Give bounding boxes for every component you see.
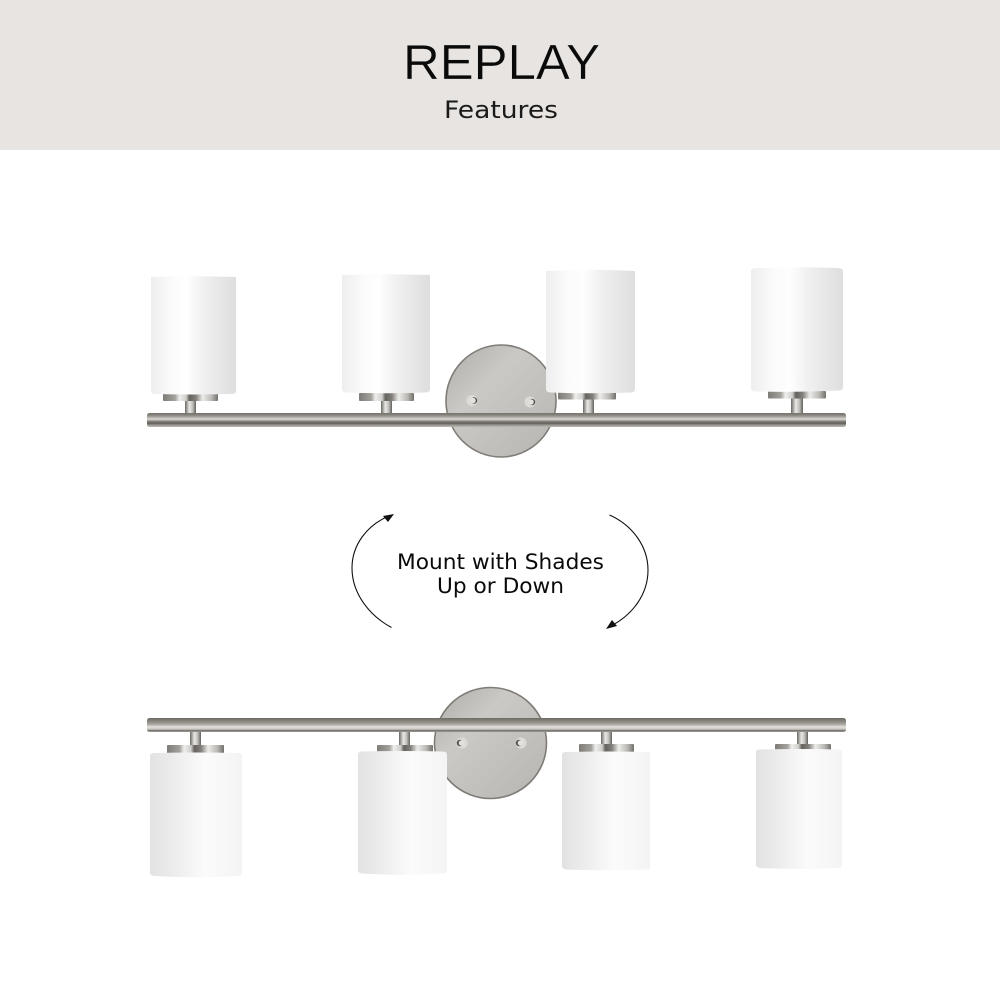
bar	[147, 718, 846, 732]
collars	[167, 744, 831, 754]
stems	[190, 730, 808, 747]
shade 4	[756, 749, 842, 869]
rotate callout	[352, 514, 648, 629]
shade 2	[342, 274, 430, 393]
stems	[185, 398, 803, 415]
shade 4	[751, 267, 843, 392]
fixture: shades up	[147, 267, 846, 457]
fixture: shades down	[147, 688, 846, 877]
callout text	[397, 550, 604, 598]
header band	[0, 0, 1000, 150]
shade 3	[546, 270, 635, 393]
subtitle: Features	[444, 96, 558, 124]
bar	[147, 413, 846, 427]
arrow: right arc	[606, 515, 648, 629]
collars	[163, 391, 826, 401]
title: REPLAY	[403, 36, 600, 90]
arrow: left arc	[352, 514, 394, 628]
wall plate	[434, 688, 546, 798]
callout text: Up or Down	[437, 574, 564, 598]
callout text: Mount with Shades	[397, 550, 604, 574]
shade 1	[151, 276, 236, 394]
shade 1	[150, 752, 242, 877]
shade 2	[358, 751, 447, 875]
wall plate	[446, 345, 556, 457]
shade 3	[562, 752, 650, 870]
